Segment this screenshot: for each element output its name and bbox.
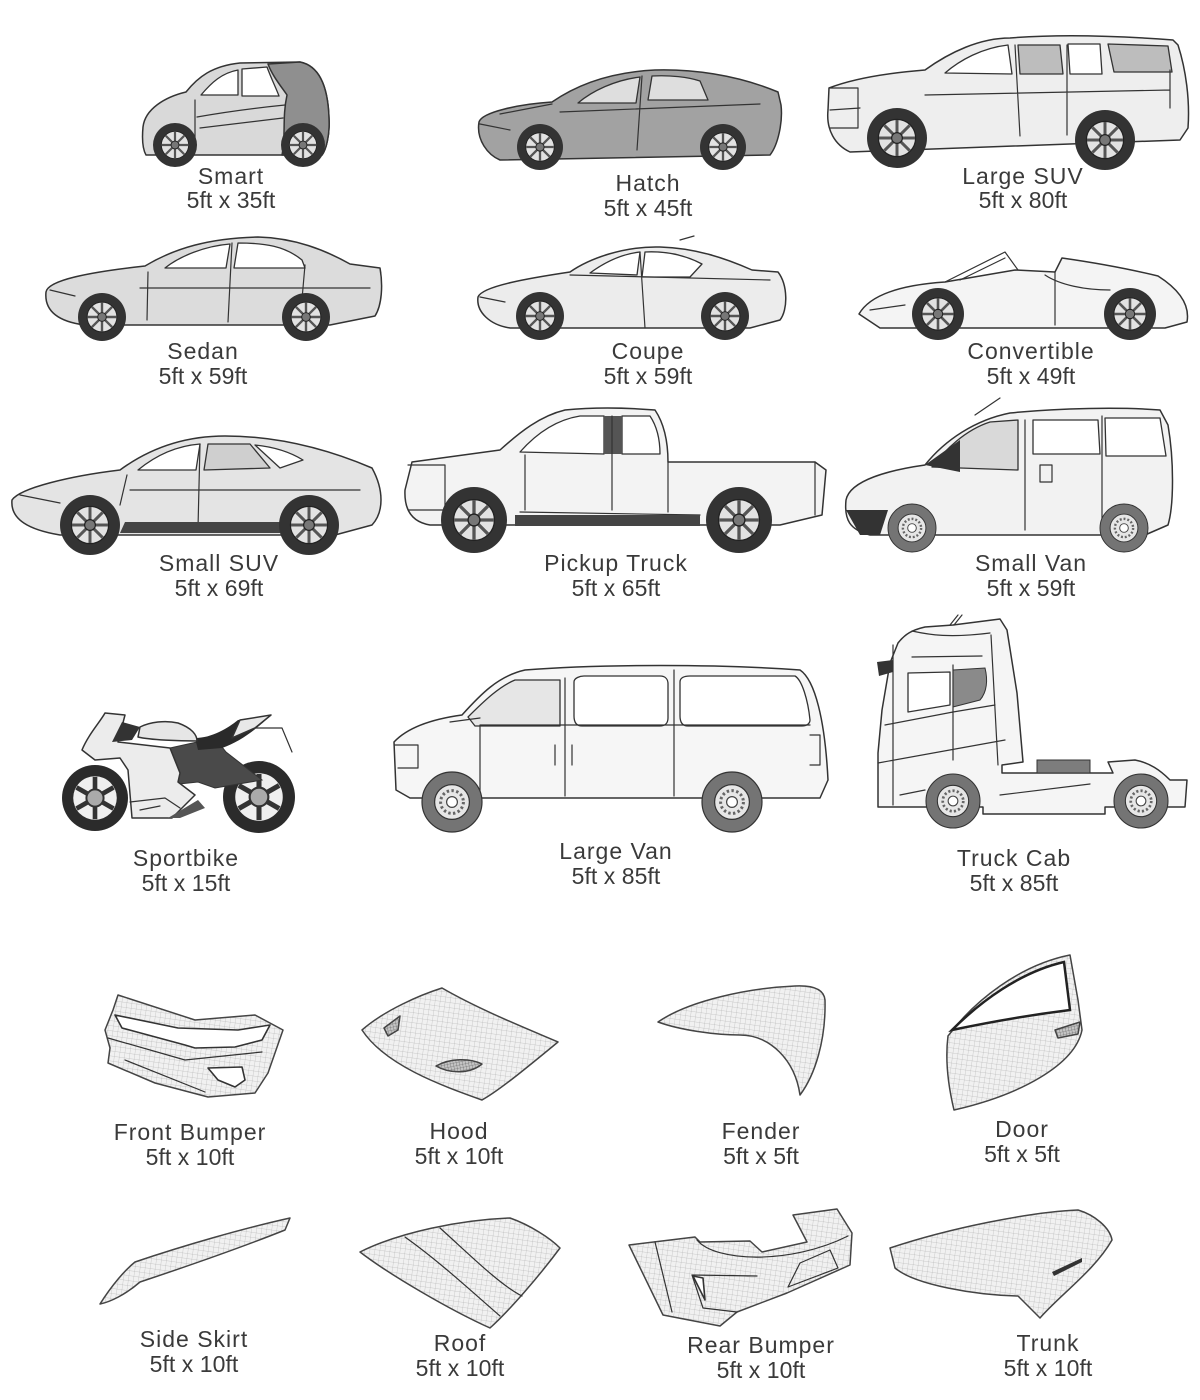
label: Sportbike: 5ft x 15ft [142, 870, 231, 896]
vehicle: Coupe [478, 236, 786, 340]
label: Pickup Truck: 5ft x 65ft [572, 575, 661, 601]
label: Pickup Truck: Pickup Truck [544, 550, 688, 576]
label: Large SUV [962, 163, 1084, 213]
vehicle: Sportbike [62, 713, 295, 833]
vehicle: Large SUV [828, 36, 1189, 170]
part: Side Skirt [100, 1218, 290, 1304]
label: Smart: Smart [198, 163, 264, 189]
label: Small SUV [159, 550, 279, 601]
label: Large Van [559, 838, 673, 889]
label: Rear Bumper: 5ft x 10ft [717, 1357, 806, 1383]
label: Truck Cab: Truck Cab [957, 845, 1071, 871]
vehicle: Truck Cab [877, 615, 1187, 828]
vehicle: Convertible [859, 252, 1188, 340]
label: Convertible: 5ft x 49ft [987, 363, 1076, 389]
label: Fender [722, 1118, 800, 1169]
label: Fender: Fender [722, 1118, 800, 1144]
label: Smart [187, 163, 276, 213]
label: Small SUV: 5ft x 69ft [175, 575, 264, 601]
label: Fender: 5ft x 5ft [723, 1143, 799, 1169]
label: Coupe: Coupe [612, 338, 684, 364]
label: Hatch [604, 170, 693, 221]
label: Trunk: 5ft x 10ft [1004, 1355, 1093, 1381]
label: Hatch: Hatch [615, 170, 681, 196]
label: Large Van: 5ft x 85ft [572, 863, 661, 889]
label: Pickup Truck [544, 550, 688, 601]
label: Roof: Roof [434, 1330, 486, 1356]
label: Small Van [975, 550, 1087, 601]
label: Small SUV: Small SUV [159, 550, 279, 576]
label: Sportbike [133, 845, 239, 896]
vehicle: Small Van [846, 398, 1172, 552]
part: Hood [362, 988, 558, 1100]
label: Side Skirt: Side Skirt [140, 1326, 248, 1352]
label: Large Van: Large Van [559, 838, 673, 864]
label: Trunk [1004, 1330, 1093, 1381]
label: Large SUV: Large SUV [962, 163, 1084, 189]
vehicle: Smart [142, 62, 329, 167]
label: Truck Cab [957, 845, 1071, 896]
label: Sedan: 5ft x 59ft [159, 363, 248, 389]
vehicle: Small SUV [12, 436, 381, 555]
part: Fender [658, 986, 825, 1095]
label: Door [984, 1116, 1060, 1167]
part: Roof [360, 1218, 560, 1328]
part: Door [947, 955, 1082, 1110]
label: Coupe: 5ft x 59ft [604, 363, 693, 389]
label: Truck Cab: 5ft x 85ft [970, 870, 1059, 896]
label: Side Skirt: 5ft x 10ft [150, 1351, 239, 1377]
label: Rear Bumper: Rear Bumper [687, 1332, 835, 1358]
label: Rear Bumper [687, 1332, 835, 1383]
vehicle: Pickup Truck [405, 408, 826, 553]
label: Smart: 5ft x 35ft [187, 187, 276, 213]
vehicle: Sedan [46, 237, 382, 341]
label: Hatch: 5ft x 45ft [604, 195, 693, 221]
label: Front Bumper: 5ft x 10ft [146, 1144, 235, 1170]
label: Hood: 5ft x 10ft [415, 1143, 504, 1169]
label: Sedan: Sedan [167, 338, 239, 364]
label: Small Van: 5ft x 59ft [987, 575, 1076, 601]
label: Convertible: Convertible [967, 338, 1095, 364]
part: Trunk [890, 1210, 1112, 1318]
label: Sedan [159, 338, 248, 389]
label: Door: Door [995, 1116, 1049, 1142]
label: Front Bumper [114, 1119, 266, 1170]
label: Roof [416, 1330, 505, 1381]
label: Coupe [604, 338, 693, 389]
label: Large SUV: 5ft x 80ft [979, 187, 1068, 213]
label: Small Van: Small Van [975, 550, 1087, 576]
label: Hood: Hood [430, 1118, 488, 1144]
part: Front Bumper [105, 995, 283, 1097]
vehicle: Hatch [479, 70, 781, 170]
label: Trunk: Trunk [1017, 1330, 1079, 1356]
label: Roof: 5ft x 10ft [416, 1355, 505, 1381]
label: Convertible [967, 338, 1095, 389]
label: Hood [415, 1118, 504, 1169]
label: Door: 5ft x 5ft [984, 1141, 1060, 1167]
label: Front Bumper: Front Bumper [114, 1119, 266, 1145]
label: Side Skirt [140, 1326, 248, 1377]
part: Rear Bumper [629, 1209, 852, 1326]
vehicle: Large Van [394, 666, 828, 832]
label: Sportbike: Sportbike [133, 845, 239, 871]
